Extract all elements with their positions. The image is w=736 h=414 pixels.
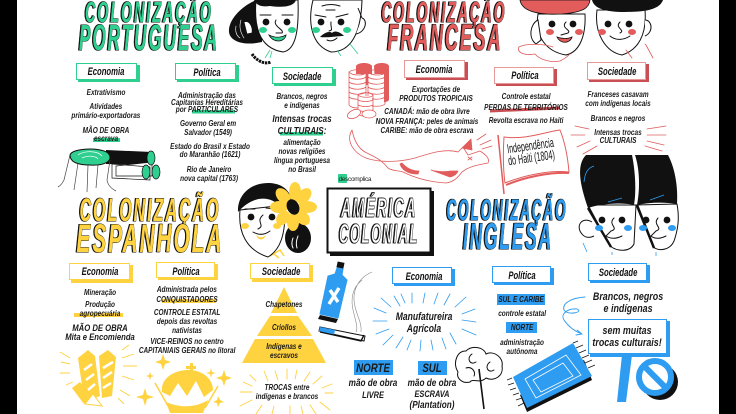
box: economia bbox=[76, 64, 140, 82]
text: economia: Mita e Encomienda bbox=[65, 331, 135, 342]
text: sul: ESCRAVA bbox=[414, 388, 450, 399]
text: política: administração bbox=[500, 337, 544, 347]
title: espanhola bbox=[76, 192, 224, 261]
box: política bbox=[176, 64, 239, 82]
text: política: autônoma bbox=[507, 346, 537, 356]
text: economia bbox=[70, 87, 140, 143]
text: sul bbox=[408, 361, 456, 410]
chart: social pyramid bbox=[242, 287, 326, 363]
box: economia: Economia bbox=[88, 66, 124, 78]
title: américa colonial: AMÉRICA bbox=[340, 192, 417, 223]
text: sociedade: alimentação bbox=[283, 137, 321, 147]
text: economia bbox=[376, 84, 478, 135]
icon: flag haiti: Independência bbox=[506, 135, 555, 156]
box: política bbox=[156, 262, 218, 280]
text: economia: Produção bbox=[85, 299, 115, 309]
title: espanhola: COLONIZAÇÃO bbox=[80, 192, 220, 228]
icon: cotton tree bbox=[456, 347, 502, 409]
rays: manufatureira bbox=[373, 293, 476, 351]
text: sociedade: novas religiões bbox=[278, 146, 326, 156]
text: política: Administração das bbox=[177, 90, 236, 100]
box: sociedade bbox=[250, 264, 313, 282]
text: economia: PRODUTOS TROPICAIS bbox=[399, 93, 473, 103]
text: política: depois das revoltas bbox=[157, 316, 217, 326]
text: política: NORTE bbox=[511, 322, 534, 332]
text: sociedade: CULTURAIS bbox=[600, 135, 637, 145]
text: política bbox=[497, 294, 547, 356]
chart: social pyramid: escravos bbox=[270, 350, 298, 360]
text: norte: LIVRE bbox=[362, 389, 384, 400]
icon: spanish woman bbox=[238, 182, 317, 258]
box: sociedade: Sociedade bbox=[283, 71, 322, 83]
rays: trocas bbox=[240, 369, 333, 414]
text: política: Estado do Brasil x Estado bbox=[170, 141, 250, 151]
logo: descomplica: descomplica bbox=[338, 176, 372, 183]
text: política: Salvador (1549) bbox=[184, 127, 232, 137]
text: política bbox=[484, 91, 568, 125]
text: norte: mão de obra bbox=[349, 376, 397, 388]
text: sul: (Plantation) bbox=[410, 398, 454, 410]
text: sociedade: Intensas trocas bbox=[594, 127, 642, 137]
text: sociedade bbox=[593, 291, 664, 315]
box: economia: Economia bbox=[416, 64, 452, 76]
panel: américa colonial title: COLONIAL bbox=[339, 218, 419, 249]
text: política: nova capital (1763) bbox=[180, 173, 239, 183]
panel: colonização inglesa: COLONIZAÇÃO bbox=[446, 193, 568, 227]
text: manufatureira: Agrícola bbox=[406, 323, 442, 335]
chart: social pyramid: Criollos bbox=[272, 322, 296, 332]
icon: flag haiti: do Haiti (1804) bbox=[507, 147, 556, 168]
text: sul: mão de obra bbox=[408, 376, 456, 388]
box: economia bbox=[392, 268, 455, 286]
box: política: Política bbox=[172, 266, 200, 278]
icon: logs bbox=[58, 149, 160, 192]
sign: no trade bbox=[588, 320, 678, 402]
text: sociedade: com indígenas locais bbox=[585, 98, 651, 108]
text: política: Governo Geral em bbox=[180, 118, 237, 128]
panel: américa colonial title bbox=[328, 188, 434, 256]
text: política: SUL E CARIBE bbox=[498, 294, 545, 304]
box: sociedade bbox=[588, 264, 650, 283]
title: inglesa bbox=[446, 193, 568, 257]
text: economia: Extrativismo bbox=[87, 87, 126, 97]
box: economia: Economia bbox=[406, 271, 442, 283]
icon: french man bbox=[592, 0, 663, 58]
panel: colonização portuguesa: PORTUGUESA bbox=[79, 17, 219, 58]
panel: colonização espanhola bbox=[60, 182, 333, 414]
panel: colonização inglesa bbox=[318, 155, 678, 412]
panel: colonização portuguesa bbox=[58, 0, 365, 192]
text: economia: NOVA FRANÇA: peles de animais bbox=[376, 116, 478, 126]
text: sociedade: e indígenas bbox=[604, 303, 653, 315]
title: francesa: FRANCESA bbox=[388, 17, 502, 58]
box: sociedade: Sociedade bbox=[599, 267, 638, 279]
icon: fox bbox=[350, 130, 492, 183]
text: política: Controle estatal bbox=[502, 91, 551, 101]
text: política: CAPITANIAIS GERAIS no litoral bbox=[139, 345, 236, 355]
text: sociedade: língua portuguesa bbox=[274, 155, 330, 165]
text: política: PERDAS DE TERRITÓRIOS bbox=[484, 102, 568, 112]
text: economia: CARIBE: mão de obra escrava bbox=[380, 125, 474, 135]
box: política bbox=[492, 266, 554, 285]
box: política: Política bbox=[511, 70, 539, 82]
text: política: CONQUISTADORES bbox=[156, 294, 218, 304]
text: norte bbox=[349, 360, 397, 400]
icon: english guards bbox=[579, 155, 678, 256]
icon: rug bbox=[507, 341, 595, 412]
text: política: do Maranhão (1621) bbox=[180, 149, 241, 159]
text: sul: SUL bbox=[422, 362, 442, 375]
chart: social pyramid: Indígenas e bbox=[266, 341, 302, 351]
arrow: swirl bbox=[563, 297, 585, 335]
text: manufatureira: Manufatureira bbox=[396, 311, 453, 323]
text: economia bbox=[65, 287, 135, 342]
chart: social pyramid: Chapetones bbox=[265, 299, 303, 309]
text: política: Rio de Janeiro bbox=[187, 164, 232, 174]
text: sociedade: Brancos, negros bbox=[276, 91, 328, 101]
icon: flag haiti bbox=[498, 130, 569, 194]
text: economia: escrava bbox=[94, 133, 118, 143]
text: economia: primário-exportadoras bbox=[70, 110, 140, 120]
icon: portuguese woman bbox=[229, 0, 298, 63]
text: sociedade: Franceses casavam bbox=[587, 89, 649, 99]
text: manufatureira bbox=[396, 311, 453, 335]
text: política bbox=[139, 284, 236, 355]
title: francesa bbox=[382, 0, 506, 58]
text: economia: agropecuária bbox=[80, 308, 120, 318]
text: economia: MÃO DE OBRA bbox=[72, 322, 128, 333]
text: trocas: TROCAS entre bbox=[265, 382, 309, 392]
text: sociedade bbox=[585, 89, 651, 145]
icon: crystals bbox=[60, 345, 137, 406]
box: economia bbox=[70, 264, 133, 283]
text: norte: NORTE bbox=[356, 362, 391, 375]
box: sociedade bbox=[272, 68, 336, 86]
title: espanhola: ESPANHOLA bbox=[76, 217, 224, 261]
panel: colonização francesa bbox=[346, 0, 666, 194]
icon: french woman bbox=[518, 0, 590, 62]
box: sociedade: Sociedade bbox=[262, 266, 301, 278]
text: economia: Mineração bbox=[84, 287, 117, 297]
text: política: controle estatal bbox=[498, 308, 547, 318]
text: política: VICE-REINOS no centro bbox=[150, 336, 224, 346]
text: sociedade: Brancos e negros bbox=[591, 113, 645, 123]
text: economia: MÃO DE OBRA bbox=[83, 125, 129, 135]
box: política bbox=[494, 68, 557, 86]
title: portuguesa bbox=[79, 0, 219, 58]
box: economia: Economia bbox=[82, 266, 118, 278]
text: sociedade: CULTURAIS: bbox=[278, 125, 326, 136]
icon: crown bbox=[136, 354, 232, 413]
box: sociedade: Sociedade bbox=[598, 66, 637, 78]
icon: bottle bbox=[318, 261, 347, 323]
title: inglesa: INGLESA bbox=[463, 216, 553, 257]
text: política bbox=[170, 90, 250, 183]
box: política: Política bbox=[508, 270, 536, 282]
box: sociedade bbox=[588, 62, 649, 82]
text: política: Administrada pelos bbox=[156, 284, 217, 294]
text: sociedade: e indígenas bbox=[284, 100, 320, 110]
title: américa colonial bbox=[339, 192, 419, 249]
text: trocas: indígenas e brancos bbox=[256, 391, 318, 401]
text: política: Revolta escrava no Haiti bbox=[489, 115, 564, 125]
text: sociedade: no Brasil bbox=[288, 164, 317, 174]
icon: coins bbox=[346, 63, 389, 121]
text: sociedade: Brancos, negros bbox=[593, 291, 664, 303]
text: política: por PARTICULARES bbox=[175, 104, 238, 114]
text: sociedade: Intensas trocas bbox=[272, 113, 332, 124]
text: sociedade bbox=[272, 91, 332, 174]
text: economia: Exportações de bbox=[412, 84, 460, 94]
sign: no trade: trocas culturais! bbox=[592, 337, 662, 349]
sign: no trade: sem muitas bbox=[603, 325, 652, 337]
text: política: nativistas bbox=[172, 325, 202, 335]
icon: portuguese man bbox=[311, 0, 365, 56]
box: economia bbox=[404, 60, 468, 80]
text: política: Capitanias Hereditárias bbox=[171, 97, 243, 107]
rays: culturais bbox=[571, 126, 666, 154]
text: trocas bbox=[256, 382, 318, 401]
text: economia: CANADÁ: mão de obra livre bbox=[384, 106, 470, 116]
icon: cigarette bbox=[319, 272, 372, 341]
box: política: Política bbox=[193, 67, 221, 79]
text: política: CONTROLE ESTATAL bbox=[154, 307, 221, 317]
text: economia: Atividades bbox=[89, 101, 122, 111]
